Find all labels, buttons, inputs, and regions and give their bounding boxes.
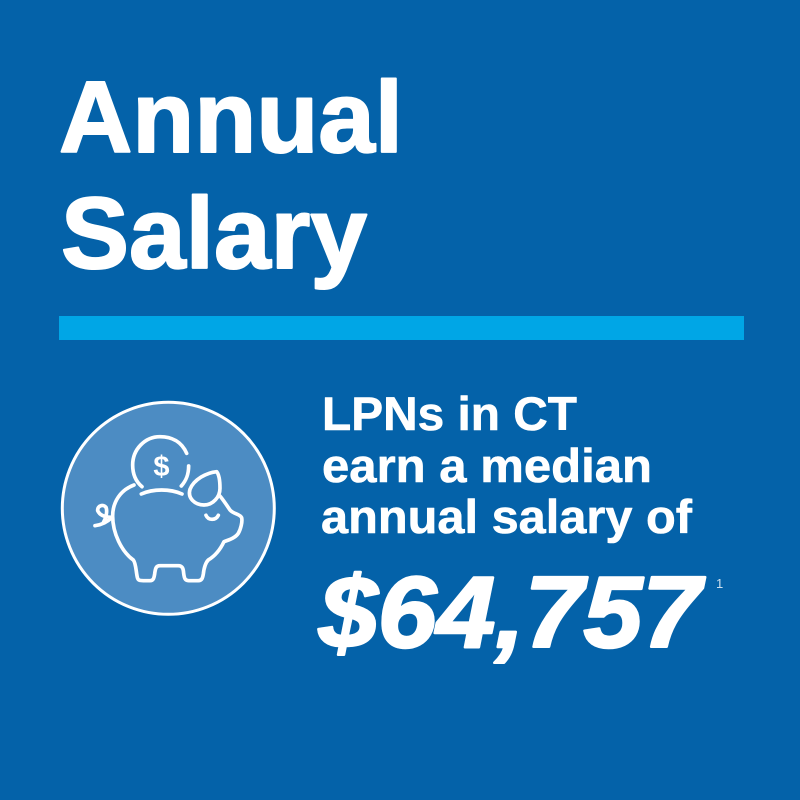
body text: earn a median	[322, 439, 652, 492]
title: Annual	[59, 62, 403, 174]
piggy bank line art	[95, 437, 242, 581]
title: Salary	[61, 178, 367, 290]
icon: piggy bank with coin	[62, 402, 274, 614]
body text: annual salary of	[321, 490, 692, 543]
pig back slot	[141, 490, 182, 494]
body text	[321, 387, 692, 543]
pig ear	[189, 472, 220, 505]
accent bar	[59, 316, 744, 340]
body text: LPNs in CT	[322, 387, 577, 440]
icon: dollar sign: $	[153, 451, 170, 483]
icon background circle	[62, 402, 274, 614]
title	[59, 62, 403, 290]
salary figure: $64,757	[318, 557, 706, 669]
pig eye	[206, 515, 218, 519]
pig body	[113, 485, 242, 581]
coin outline	[133, 437, 189, 487]
pig tail	[95, 506, 112, 526]
footnote marker: 1	[716, 576, 723, 591]
